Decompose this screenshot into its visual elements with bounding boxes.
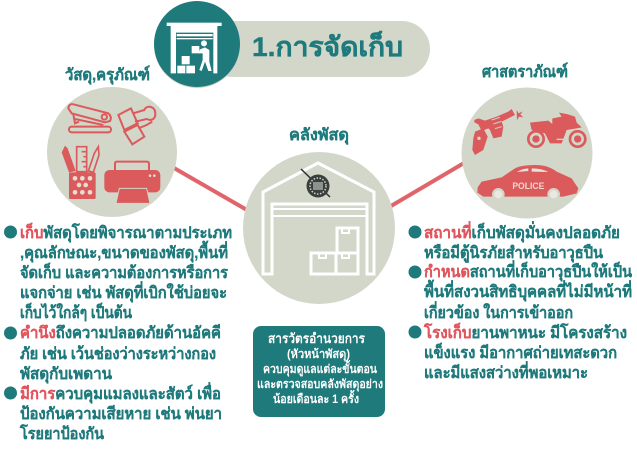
text block: materials guidance: พัสดุกับเพดาน [20, 365, 112, 384]
title banner [154, 1, 430, 88]
icon: pen cup [62, 146, 99, 199]
text block: materials guidance: เก็บไว้ใกล้ๆ เป็นต้น [20, 301, 132, 322]
heading: warehouse: คลังพัสดุ [289, 126, 349, 145]
bullet 1 [4, 226, 17, 238]
text block: materials guidance: โรยยาป้องกัน [19, 423, 104, 443]
icon: printer [104, 162, 160, 203]
text block: weapons guidance: และมีแสงสว่างที่พอเหมาะ [424, 361, 588, 382]
right bullet 1 [408, 226, 422, 238]
panel: materials circle [47, 87, 177, 217]
callout: responsible officer: ควบคุมดูแลแต่ละขั้นตอน [263, 359, 378, 377]
bullet 1 text: เก็บพัสดุโดยพิจารณาตามประเภท [20, 221, 232, 243]
panel: weapons circle [462, 88, 592, 218]
bullet 3 text: มีการควบคุมแมลงและสัตว์ เพื่อ [20, 382, 221, 404]
icon: warehouse worker [154, 1, 240, 88]
title pill [205, 21, 430, 77]
right bullet 2 [408, 266, 422, 278]
callout: responsible officer: (หัวหน้าพัสดุ) [287, 347, 350, 362]
icon: police car: POLICE [512, 181, 544, 191]
text block: weapons guidance [408, 221, 632, 382]
icon: revolver [472, 109, 523, 155]
text block: materials guidance: แจกจ่าย เช่น พัสดุที่เบิกใช้บ่อยจะ [20, 281, 227, 303]
icon: motorcycle [528, 113, 585, 147]
callout: responsible officer: และตรวจสอบคลังพัสดุอย่าง [257, 377, 383, 392]
callout: responsible officer: น้อยเดือนละ 1 ครั้ง [273, 389, 359, 406]
text block: materials guidance [4, 221, 232, 443]
bullet 2 text: คำนึงถึงความปลอดภัยด้านอัคคี [20, 323, 221, 342]
right bullet 1 text: สถานที่เก็บพัสดุมั่นคงปลอดภัย [424, 221, 620, 243]
bullet 2 [4, 326, 17, 340]
callout: responsible officer [253, 326, 385, 417]
text block: materials guidance: จัดเก็บ และความต้องการหรือการ [20, 261, 228, 282]
text block: materials guidance: ,คุณลักษณะ,ขนาดของพัสดุ,พื้นที่ [20, 240, 228, 263]
text block: materials guidance: ภัย เช่น เว้นช่องว่างระหว่างกอง [20, 345, 216, 363]
right bullet 3 text: โรงเก็บยานพาหนะ มีโครงสร้าง [423, 321, 627, 342]
icon: binder clips [118, 107, 155, 144]
connector: left circle to warehouse [174, 168, 247, 210]
icon: warehouse outline [263, 163, 374, 274]
text block: weapons guidance: หรือมีตู้นิรภัยสำหรับอาวุธปืน [424, 243, 603, 264]
connector: right circle to warehouse [391, 163, 464, 206]
callout: responsible officer: สารวัตรอำนวยการ [268, 331, 366, 346]
heading: materials: วัสดุ,ครุภัณฑ์ [65, 65, 150, 85]
text block: materials guidance: ป้องกันความเสียหาย เช่น พ่นยา [20, 404, 222, 423]
title text: 1.การจัดเก็บ [252, 29, 403, 62]
icon: stapler [68, 104, 111, 132]
icon: seal emblem [301, 169, 330, 198]
panel: warehouse circle [243, 152, 395, 304]
bullet 3 [4, 386, 17, 400]
text block: weapons guidance: เกี่ยวข้อง ในการเข้าออก [424, 301, 573, 322]
heading: weapons: ศาสตราภัณฑ์ [482, 62, 568, 81]
text block: weapons guidance: แข็งแรง มีอากาศถ่ายเทสะดวก [424, 341, 617, 362]
right bullet 3 [408, 326, 422, 338]
